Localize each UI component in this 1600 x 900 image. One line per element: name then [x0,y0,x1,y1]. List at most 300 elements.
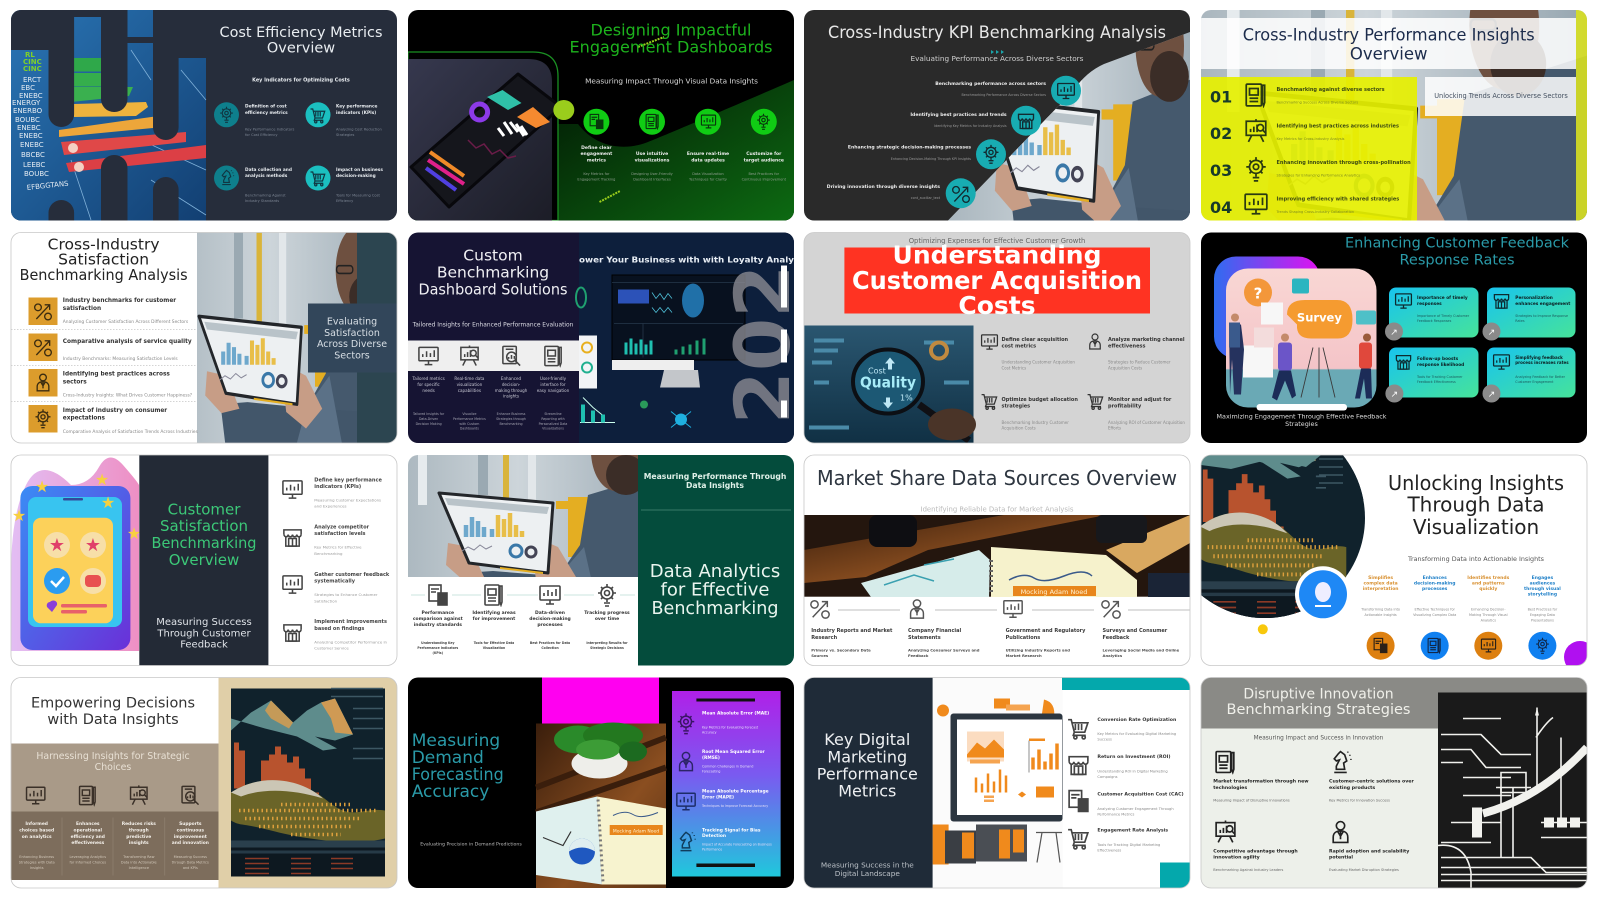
yellow edge stripe [1576,10,1587,220]
title band: Overview [1350,44,1428,64]
step icons [429,584,616,606]
card: timely responses: Importance of timely [1417,295,1468,301]
item: impact on business: Efficiency [336,199,354,203]
four descriptions: Real-time data [454,376,485,381]
image: energy rating arrows behind pill cutouts: ENERBO [13,107,43,115]
title on red box: Customer Acquisition [852,266,1142,295]
caption [1217,412,1387,428]
image: energy rating arrows behind pill cutouts: ENEBC [19,132,43,140]
subtitle: Tailored Insights for Enhanced Performance Evaluation [412,322,574,328]
source icons [811,600,1120,618]
item 3: Performance Metrics [1097,812,1134,816]
item 1 [283,478,382,508]
title: Unlocking Insights [1388,471,1564,495]
dark band with four benefits: Data into Actionable [121,860,157,864]
four steps: Designing User-Friendly [631,172,673,176]
four descriptions: easy navigation [537,388,570,393]
title: Empowering Decisions [31,696,195,712]
item 3: Enhancing strategic decision-making processes [848,145,971,151]
caption: Maximizing Engagement Through Effective Feedback [1217,412,1387,420]
green side panel: Data Analytics [650,561,780,582]
title: Custom [463,246,523,264]
source headings: Statements [908,635,941,641]
panel: Cross-Industry KPI Benchmarking Analysis [804,10,1190,220]
step sub-labels: Performance Indicators [417,646,458,650]
source sub-labels: Feedback [908,653,929,658]
title [1388,471,1564,539]
column sub-labels: Enhancing Decision- [1471,608,1506,612]
side callout: Evaluating [327,316,377,328]
column headings: quickly [1479,586,1497,592]
image: energy rating arrows behind pill cutouts: EFBGGTANS [26,180,69,192]
panel: Unlocking Insights Through Data Visualization [1161,408,1596,673]
magenta accent [1564,641,1596,673]
dark centre column: Feedback [180,639,228,650]
item 4: Driving innovation through diverse insights [827,184,940,190]
four descriptions: Decision Making [416,422,442,426]
dark band with four benefits: Enhances [76,821,100,827]
metrics list panel: Performance [702,848,722,852]
image: energy rating arrows behind pill cutouts: ERCT [23,76,42,84]
panel: Data Analytics for Effective Benchmarking [308,375,794,675]
subtitle: Transforming Data into Actionable Insights [1407,555,1545,563]
item 2: Understanding ROI in Digital Marketing [1097,770,1168,774]
photo: quality magnifier [804,326,976,443]
card: timely responses [1385,288,1478,340]
globe badge [1295,566,1351,622]
source sub-labels: Market Research [1006,653,1042,658]
card: timely responses: Feedback Responses [1417,319,1452,323]
image: energy rating arrows behind pill cutouts: EBC [21,84,35,92]
item 1: Key Metrics for Evaluating Digital Marketing [1097,732,1176,736]
subtitle: Measuring Impact and Success in Innovation [1254,736,1384,742]
four descriptions: Streamline [544,412,562,416]
photo: notebook on wood: Mocking Adam Noed [1021,588,1087,596]
title: Accuracy [412,782,489,802]
yellow list panel: Strategies for Enhancing Performance Analytics [1276,174,1360,178]
image: energy rating arrows behind pill cutouts: CINC [23,58,42,66]
metrics list panel: Error (MAPE) [702,794,734,800]
item 1: and Experiences [314,504,347,508]
item: customer-centric: existing products [1329,785,1375,791]
item: analyze marketing channel: Analyze marketing channel [1108,337,1185,343]
title on red box: Understanding [893,240,1101,270]
dark band with four benefits: through [129,828,149,834]
title: Engagement Dashboards [570,38,772,56]
source sub-labels: Leveraging Social Media and Online [1102,648,1180,652]
four descriptions: visualization [457,382,483,387]
column headings: Enhances [1423,575,1447,581]
item: optimize budget: Optimize budget allocation [1002,397,1078,403]
item: data collection: analysis methods [245,173,288,179]
title: Benchmarking [437,264,549,282]
photo: man with tablet, diagonal crop [948,32,1190,220]
survey illustration: ? [1254,284,1262,302]
image: energy rating arrows behind pill cutouts: ENEBC [19,92,43,100]
yellow list panel: 02 [1210,124,1232,143]
step labels [413,610,630,628]
metrics list panel: (RMSE) [702,755,720,761]
yellow list panel: 04 [1210,198,1232,217]
card: follow-up: ↗ [1391,390,1398,400]
item: market transformation [1213,752,1309,802]
item: competitive advantage: Competitive advantage through [1213,848,1298,854]
four steps: Data Visualization [692,172,724,176]
step sub-labels [417,641,628,655]
photo: quality magnifier: 1% [900,394,913,402]
source sub-labels: Analyzing Consumer Surveys and [908,648,980,652]
step sub-labels: Tools for Effective Data [474,641,514,645]
card: timely responses: Importance of Timely Customer [1417,314,1470,318]
subtitle: Identifying Reliable Data for Market Analysis [921,506,1074,514]
dark band with four benefits: for Informed Choices [70,860,106,864]
item: define clear acquisition cost metrics: Define clear acquisition [1002,337,1069,343]
item: impact on business: Tools for Measuring Cost [335,194,380,198]
item: definition of cost efficiency metrics: for Cost Efficiency [245,133,278,137]
framed data landscape [218,678,397,888]
card: simplifying feedback: process increases rates [1515,360,1569,365]
item: data collection: Data collection and [245,167,292,173]
item: optimize budget: Benchmarking Industry Customer [1002,420,1069,425]
dark side panel: Marketing [827,748,907,766]
item 3: Enhancing Decision-Making Through KPI Insights [891,157,971,161]
item 3: Gather customer feedback [314,572,390,578]
subtitle: Optimizing Expenses for Effective Customer Growth [909,237,1085,245]
title: Enhancing Customer Feedback [1345,236,1570,252]
step sub-labels: Strategic Decisions [590,646,624,650]
card: simplifying feedback: Analyzing Feedback for Better [1515,375,1566,379]
panel: Designing Impactful Engagement Dashboards [408,10,794,220]
four descriptions: Visualize [462,412,476,416]
four descriptions: Reporting with [541,417,565,421]
column sub-labels: Making Through Visual [1469,613,1508,617]
four descriptions: Benchmarking [499,422,523,426]
item 3: systematically [314,578,356,584]
card: personalization: Strategies to Improve Response [1515,314,1568,318]
title: Cost Efficiency Metrics [220,25,382,41]
circular data landscape [1161,408,1371,625]
four steps: visualizations [635,158,670,164]
four descriptions: Dashboards [460,426,479,430]
four steps: Use intuitive [636,151,668,157]
dark band with four benefits: Intelligence [129,866,149,870]
item 4 [284,619,388,650]
card: personalization [1482,288,1576,340]
column sub-labels: Presentations [1531,618,1554,622]
item: define clear acquisition cost metrics: Understanding Customer Acquisition [1002,360,1075,364]
dark side panel: Digital Landscape [835,869,900,878]
row 4: Impact of industry on consumer [63,408,167,414]
column sub-labels: Effective Techniques for [1414,608,1456,612]
item: analyze marketing channel: Strategies to Reduce Customer [1108,360,1171,364]
four descriptions: Data-Driven [419,417,438,421]
item 4 [827,178,976,208]
row 4: Comparative Analysis of Satisfaction Trends Across Industries [63,429,199,435]
four steps: data updates [691,158,725,164]
monitor illustration [933,678,1063,888]
card: follow-up: response likelihood [1417,362,1464,368]
title [418,246,568,298]
item 1: Benchmarking Performance Across Diverse Sectors [961,93,1046,97]
dark band with four benefits: Enhancing Business [19,855,54,859]
column sub-labels: Visualizing Complex Data [1413,613,1456,617]
photo: quality magnifier: Quality [860,374,916,392]
row 4: expectations [63,416,106,422]
four descriptions: Personalized Data [539,422,567,426]
step labels: decision-making [529,616,571,622]
yellow list panel: Trends Shaping Cross-Industry Collaboration [1276,210,1354,214]
dark centre column: Overview [169,551,239,569]
item: data collection [214,166,292,203]
column headings: processes [1422,586,1448,592]
four steps: Define clear [581,145,612,151]
side callout [308,304,397,372]
column headings: interpretation [1363,586,1399,592]
source headings: Feedback [1102,635,1130,641]
four descriptions: User-friendly [540,376,567,381]
item 3: Satisfaction [314,598,338,603]
green side panel [638,455,794,666]
item: monitor and adjust: Analyzing ROI of Customer Acquisition [1108,420,1185,425]
source headings [811,628,1168,641]
item: key performance indicators [306,102,382,137]
item 4: cont_auxiliar_text [911,196,941,200]
dark centre column: Benchmarking [152,534,256,552]
source sub-labels: Analytics [1102,653,1123,658]
row 4 [28,405,199,435]
metrics list panel: Mean Absolute Error (MAE) [702,710,769,716]
item: rapid adoption: Rapid adoption and scalability [1329,848,1409,854]
step labels: Tracking progress [584,610,630,616]
dark band with four benefits: effectiveness [71,840,105,846]
item: monitor and adjust: profitability [1108,404,1142,410]
yellow list panel: Improving efficiency with shared strategies [1276,196,1399,202]
four descriptions [411,376,570,430]
phone illustration: ★ [127,524,141,543]
item: competitive advantage [1213,821,1298,872]
dark side panel: Measuring Success in the [821,860,914,870]
card: simplifying feedback: ↗ [1488,390,1495,400]
grey header: Benchmarking Strategies [1226,702,1410,718]
card: follow-up: Tools for Tracking Customer [1416,375,1463,379]
card: personalization: ↗ [1488,328,1495,338]
icon band [408,340,579,371]
subtitle: Evaluating Performance Across Diverse Sectors [911,54,1084,63]
title: Visualization [1413,515,1539,539]
item: optimize budget [982,395,1078,430]
step sub-labels: Collection [541,646,559,650]
image: energy rating arrows behind pill cutouts: LEEBC [23,161,45,169]
four descriptions: for specific [417,382,440,387]
four steps: Ensure real-time [687,151,729,157]
four descriptions: decision- [502,382,521,387]
card: follow-up [1385,348,1478,402]
item: data collection: Benchmarking Against [245,194,286,198]
photo: quality magnifier: Cost [868,366,886,376]
source headings: Company Financial [908,628,962,634]
green side panel: Measuring Performance Through [644,472,786,481]
dark centre column: Satisfaction [160,517,248,535]
yellow list panel: Identifying best practices across industries [1276,124,1399,130]
title: Dashboard Solutions [418,280,568,298]
phone illustration: ★ [49,535,65,556]
grey header: Disruptive Innovation [1243,686,1394,702]
phone illustration: ★ [12,506,26,525]
source sub-labels: Primary vs. Secondary Data [811,648,871,652]
step labels: for improvement [473,616,516,622]
panel: Customer Satisfaction Benchmarking Overview [11,455,397,666]
column headings: audiences [1530,580,1556,586]
row 1 [28,298,189,325]
column headings: storytelling [1528,592,1557,598]
title: Overview [267,40,335,56]
column sub-labels: Engaging Data [1530,613,1555,617]
item: market transformation: technologies [1213,785,1247,791]
background photo [1201,10,1587,220]
item: market transformation: Market transformation through new [1213,778,1309,784]
panel: Cross-Industry Satisfaction Benchmarking Analysis [12,232,397,443]
item: definition of cost efficiency metrics [214,102,294,137]
item 2: satisfaction levels [314,531,366,537]
dark band with four benefits: and innovation [172,840,209,846]
subtitle: Measuring Impact Through Visual Data Insights [585,76,758,86]
side callout: Satisfaction [324,328,380,339]
card: personalization: Rates [1515,319,1525,323]
title band: Cross-Industry Performance Insights [1243,26,1535,44]
metrics list panel: Key Metrics for Evaluating Forecast [702,726,759,730]
teal corners [1062,678,1190,888]
source sub-labels: Utilizing Industry Reports and [1006,648,1070,652]
title: Demand [412,748,484,768]
dashboard image: 202 [718,264,807,424]
step sub-labels: Understanding Key [421,641,455,645]
title [220,26,382,52]
column headings: Simplifies [1368,575,1393,581]
item 1: Success [1097,738,1112,742]
item: impact on business: decision-making [336,173,376,179]
item 1: indicators (KPIs) [314,484,361,490]
dark band with four benefits: operational [74,828,103,834]
dark band with four benefits: Transforming Raw [122,855,155,859]
four descriptions: Tailored metrics [411,376,445,381]
metrics list panel: Techniques to Improve Forecast Accuracy [701,804,768,808]
item: competitive advantage: innovation agility [1213,854,1260,860]
item 2: Identifying Key Metrics for Industry Analysis [934,124,1007,128]
item: customer-centric [1329,752,1414,802]
card: timely responses: ↗ [1390,328,1398,338]
row 1: satisfaction [63,306,101,312]
image: energy rating arrows behind pill cutouts: ENEBC [20,141,44,149]
dark band with four benefits [11,812,218,880]
four descriptions: insights [503,394,519,398]
title: with Data Insights [47,712,179,728]
card: simplifying feedback: Simplifying feedback [1515,355,1563,360]
item 2: Key Metrics for Effective [314,544,362,550]
column headings: complex data [1364,580,1398,586]
source headings: Industry Reports and Market [811,628,893,634]
source headings: Government and Regulatory [1006,628,1086,634]
column headings: Identifies trends [1467,575,1510,581]
item: impact on business [306,166,383,203]
yellow list panel: Enhancing innovation through cross-pollination [1276,160,1411,166]
dark band with four benefits: and KPIs [183,866,198,870]
title on red box: Costs [958,291,1036,320]
row 2: Comparative analysis of service quality [63,339,192,345]
item: definition of cost efficiency metrics: efficiency metrics [245,110,288,116]
panel: Custom Benchmarking Dashboard Solutions [408,232,807,443]
item: monitor and adjust: Efforts [1108,426,1121,430]
item 4: based on findings [314,626,364,632]
subtitle: Key Indicators for Optimizing Costs [252,78,350,84]
title [31,696,195,728]
dark side panel: Key Digital [824,730,910,749]
card: simplifying feedback [1482,348,1576,402]
title [571,24,772,56]
column headings: through visual [1524,586,1561,592]
item: impact on business: Impact on business [336,167,383,173]
dark band with four benefits: through Data Metrics [172,860,209,864]
tan band with icons: Harnessing Insights for Strategic [36,751,190,762]
survey illustration: Survey [1297,310,1342,324]
item 1: Measuring Customer Expectations [314,498,381,502]
subtitle [911,50,1084,63]
row 1: Industry benchmarks for customer [63,298,176,304]
dark band with four benefits: Insights [30,866,44,870]
item: customer-centric: Key Metrics for Innovation Success [1329,798,1390,802]
item 4: Implement improvements [314,619,387,625]
subtitle box: Unlocking Trends Across Diverse Sectors [1434,92,1568,100]
tan band with icons: Choices [95,762,131,773]
dashboard image [576,232,807,443]
item: optimize budget: strategies [1002,404,1030,410]
item: definition of cost efficiency metrics: Key Performance Indicators [245,128,294,132]
title: Response Rates [1399,252,1515,268]
item: key performance indicators: Strategies [336,133,354,137]
item 2: Campaigns [1097,775,1118,779]
item: optimize budget: Acquisition Costs [1002,426,1036,430]
card: simplifying feedback: Customer Engagement [1515,380,1554,384]
item 2: Identifying best practices and trends [910,112,1007,118]
item 1: Benchmarking performance across sectors [935,81,1046,87]
dark band with four benefits: improvement [174,834,207,840]
metrics list panel: Mean Absolute Percentage [702,788,769,794]
image: energy rating arrows behind pill cutouts: BOUBC [24,170,49,178]
item 2: Benchmarking [314,551,343,556]
yellow list panel: Benchmarking against diverse sectors [1276,87,1385,93]
source headings: Research [811,635,838,641]
metrics list panel: Tracking Signal for Bias [702,828,761,834]
subtitle: Evaluating Precision in Demand Predictions [420,842,522,848]
image: energy rating arrows behind pill cutouts: RL [25,51,35,59]
step sub-labels: (KPIs) [433,651,444,655]
title: Through Data [1406,492,1545,516]
photo: plant and notebook [536,722,666,888]
item 2: Return on Investment (ROI) [1097,754,1170,760]
dark centre column: Through Customer [156,628,252,639]
phone illustration: ★ [35,477,49,496]
item 3 [283,572,390,603]
item: key performance indicators: Key performance [336,104,377,110]
metrics list panel: Detection [702,833,726,839]
four descriptions: Visualizations [542,426,564,430]
title [20,236,188,284]
four descriptions: Strategies through [496,417,526,421]
green side panel: Benchmarking [652,598,778,619]
image: energy rating arrows behind pill cutouts [11,10,206,220]
item: customer-centric: Customer-centric solutions over [1329,778,1414,784]
item: data collection: Industry Standards [245,199,279,203]
phone illustration: ★ [95,470,109,489]
